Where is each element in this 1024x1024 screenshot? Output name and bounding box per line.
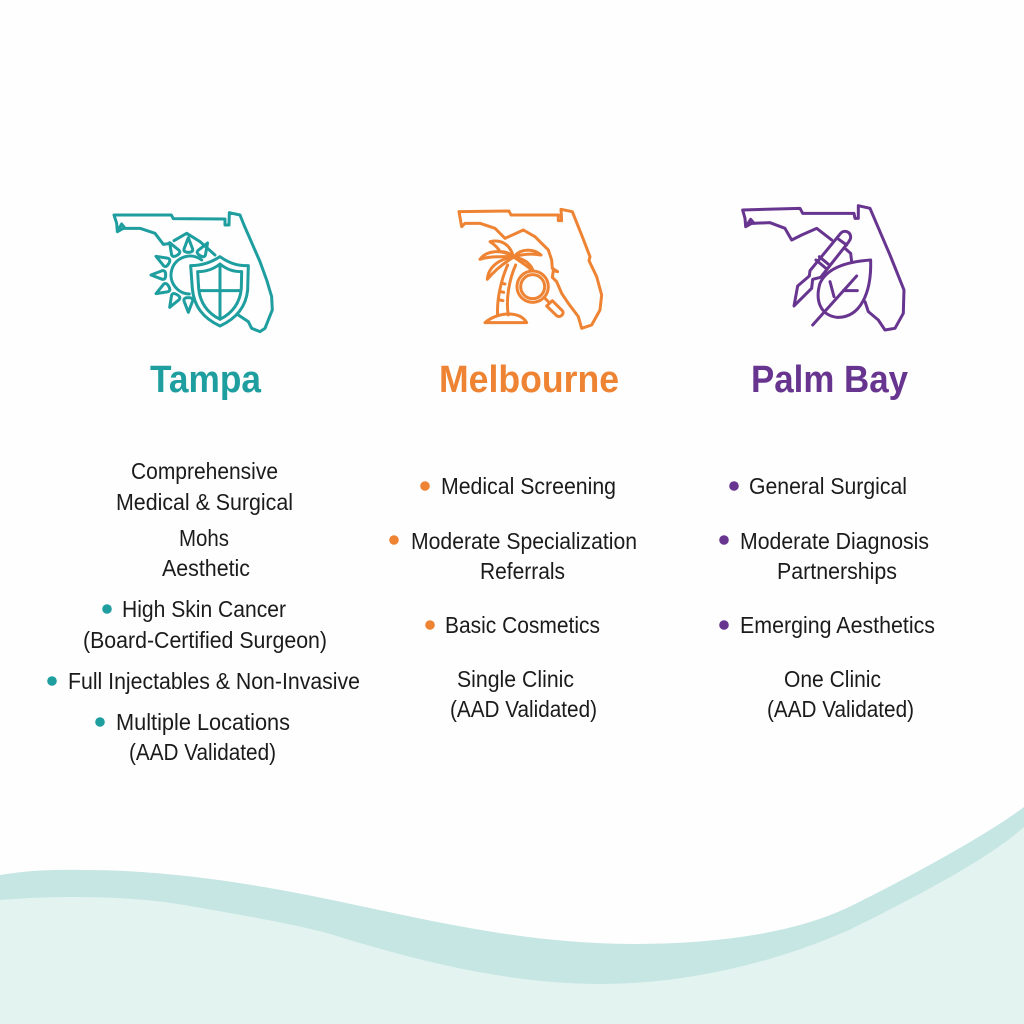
panel: Melbourne [389,209,637,722]
text block: Tampa services: (AAD Validated) [129,739,276,765]
text block: Tampa services: Comprehensive [131,458,278,484]
text block: Tampa services: High Skin Cancer [122,596,286,622]
text block: Palm Bay services: Moderate Diagnosis [740,528,929,554]
text block: Tampa services: Aesthetic [162,555,250,581]
text block: Palm Bay services: Partnerships [777,558,897,584]
text block: Tampa services: Full Injectables & Non-Invasive [68,668,360,694]
text block: Tampa services: Mohs [179,525,229,551]
text block: Melbourne services: Moderate Specialization [411,528,637,554]
text block: Melbourne services: (AAD Validated) [450,696,597,722]
text block: Tampa services [47,458,360,765]
background wave: darker band [0,807,1024,1024]
panel: Tampa [47,213,360,765]
text block: Palm Bay services: One Clinic [784,666,881,692]
heading: Palm Bay: Palm Bay [751,359,908,401]
panel: Palm Bay [719,206,935,722]
icon: Florida with sun and shield [114,213,272,332]
text block: Palm Bay services: (AAD Validated) [767,696,914,722]
text block: Palm Bay services: Emerging Aesthetics [740,612,935,638]
text block: Tampa services: (Board-Certified Surgeon) [83,627,327,653]
text block: Palm Bay services [719,473,935,722]
text block: Melbourne services: Medical Screening [441,473,616,499]
heading: Tampa: Tampa [150,359,262,401]
text block: Palm Bay services: General Surgical [749,473,907,499]
text block: Tampa services: Medical & Surgical [116,489,293,515]
heading: Melbourne: Melbourne [439,359,619,401]
text block: Melbourne services: Single Clinic [457,666,574,692]
text block: Melbourne services: Referrals [480,558,565,584]
background wave: light base [0,827,1024,1024]
text block: Melbourne services: Basic Cosmetics [445,612,600,638]
text block: Melbourne services [389,473,637,722]
text block: Tampa services: Multiple Locations [116,709,290,735]
icon: Florida with scalpel and leaf [743,206,904,330]
icon: Florida with palm tree and magnifier [459,209,602,328]
